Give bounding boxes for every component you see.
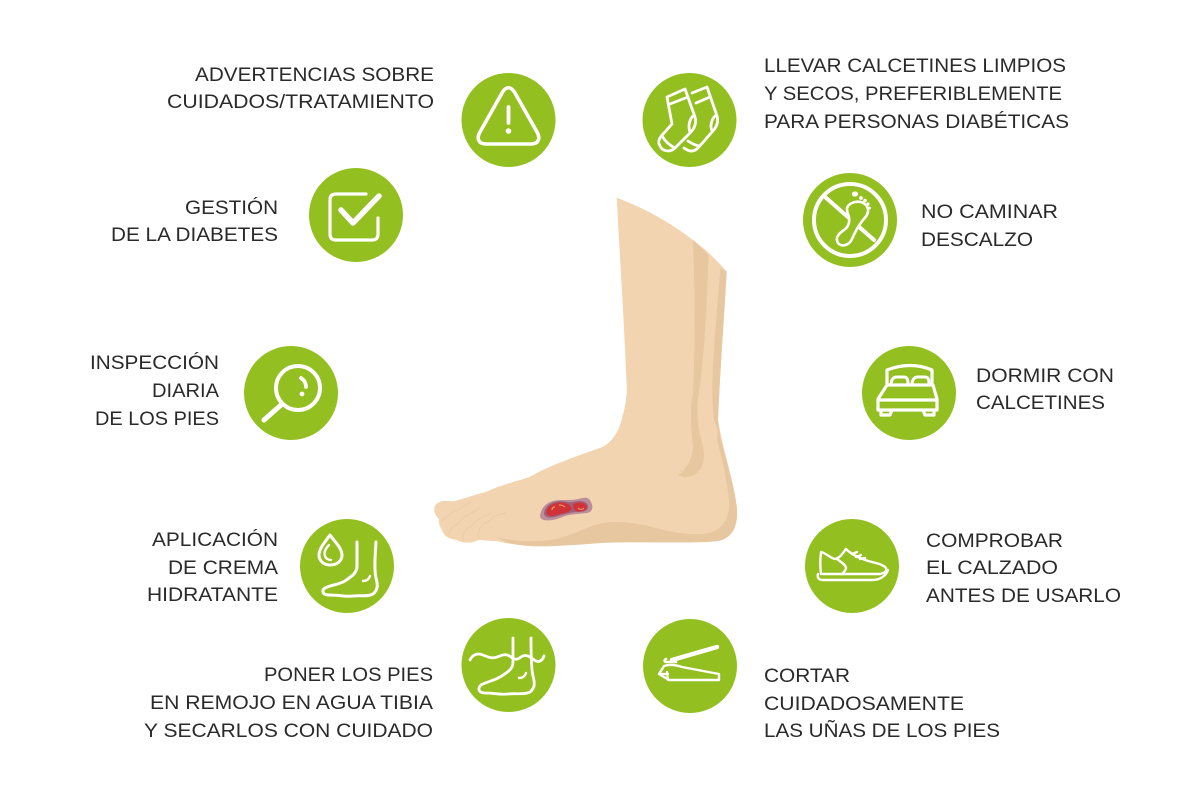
text: crema: APLICACIÓN — [152, 528, 278, 551]
foot silhouette — [434, 198, 737, 546]
text: unas: CORTAR — [764, 665, 850, 687]
text: calzado — [926, 530, 1121, 607]
item: gestion diabetes — [111, 168, 403, 262]
text: calcetines limpios: LLEVAR CALCETINES LIMPIOS — [764, 55, 1066, 77]
toe lines — [441, 501, 506, 541]
item: inspeccion — [90, 346, 338, 440]
item: calzado — [805, 519, 1121, 613]
icon: checkbox — [309, 168, 403, 262]
icon: nail clipper — [643, 619, 737, 713]
icon: socks — [642, 73, 736, 167]
achilles and ankle shading — [678, 240, 708, 477]
text: advertencias — [167, 64, 434, 113]
item: advertencias — [167, 64, 556, 167]
icon: foot in water — [462, 618, 556, 712]
text: unas: CUIDADOSAMENTE — [764, 693, 964, 715]
text: calzado: EL CALZADO — [926, 557, 1058, 579]
icon: magnifier — [244, 346, 338, 440]
ulcer inner ring — [544, 501, 588, 518]
text: remojo — [144, 664, 433, 742]
text: crema: DE CREMA — [168, 557, 278, 579]
text: calzado: ANTES DE USARLO — [926, 585, 1121, 607]
text: crema — [147, 528, 278, 606]
text: remojo: PONER LOS PIES — [264, 664, 433, 686]
item: remojo — [144, 618, 556, 742]
central foot illustration — [434, 198, 737, 546]
back of leg shading — [712, 268, 727, 436]
text: remojo: Y SECARLOS CON CUIDADO — [144, 720, 433, 742]
item: crema — [147, 519, 394, 613]
text: calcetines limpios: Y SECOS, PREFERIBLEMENTE — [764, 83, 1062, 105]
text: no caminar: NO CAMINAR — [921, 201, 1058, 223]
text: gestion: DE LA DIABETES — [111, 224, 278, 246]
text: inspeccion: DE LOS PIES — [95, 408, 219, 430]
item: unas — [643, 619, 1000, 742]
text: remojo: EN REMOJO EN AGUA TIBIA — [150, 692, 433, 714]
text: unas: LAS UÑAS DE LOS PIES — [764, 718, 1000, 742]
text: dormir — [976, 365, 1114, 414]
icon: warning triangle — [462, 73, 556, 167]
text: unas — [764, 665, 1000, 742]
text: calcetines limpios — [764, 55, 1069, 133]
text: inspeccion: DIARIA — [152, 380, 219, 402]
text: dormir: CALCETINES — [976, 392, 1105, 414]
ulcer halo — [540, 498, 592, 520]
icon: sneaker — [805, 519, 899, 613]
text: no caminar — [921, 201, 1058, 251]
icon: cream drop and foot — [300, 519, 394, 613]
text: dormir: DORMIR CON — [976, 365, 1114, 387]
text: inspeccion: INSPECCIÓN — [90, 351, 219, 374]
text: advertencias: ADVERTENCIAS SOBRE — [195, 64, 434, 86]
icon: bed — [862, 346, 956, 440]
text: inspeccion — [90, 351, 219, 430]
text: gestion — [111, 196, 278, 246]
text: gestion: GESTIÓN — [185, 196, 278, 219]
text: calzado: COMPROBAR — [926, 530, 1063, 552]
text: crema: HIDRATANTE — [147, 584, 278, 606]
item: calcetines limpios — [642, 55, 1069, 167]
ulcer wound — [546, 502, 572, 516]
item: dormir — [862, 346, 1114, 440]
sole shading — [497, 425, 737, 546]
text: no caminar: DESCALZO — [921, 229, 1033, 251]
text: calcetines limpios: PARA PERSONAS DIABÉTICAS — [764, 110, 1069, 133]
icon: no barefoot — [803, 173, 897, 267]
ulcer wound small — [573, 502, 587, 512]
item: no caminar descalzo — [803, 173, 1058, 267]
foot ulcer — [540, 498, 592, 520]
text: advertencias: CUIDADOS/TRATAMIENTO — [167, 91, 434, 113]
ulcer highlights — [552, 505, 584, 510]
